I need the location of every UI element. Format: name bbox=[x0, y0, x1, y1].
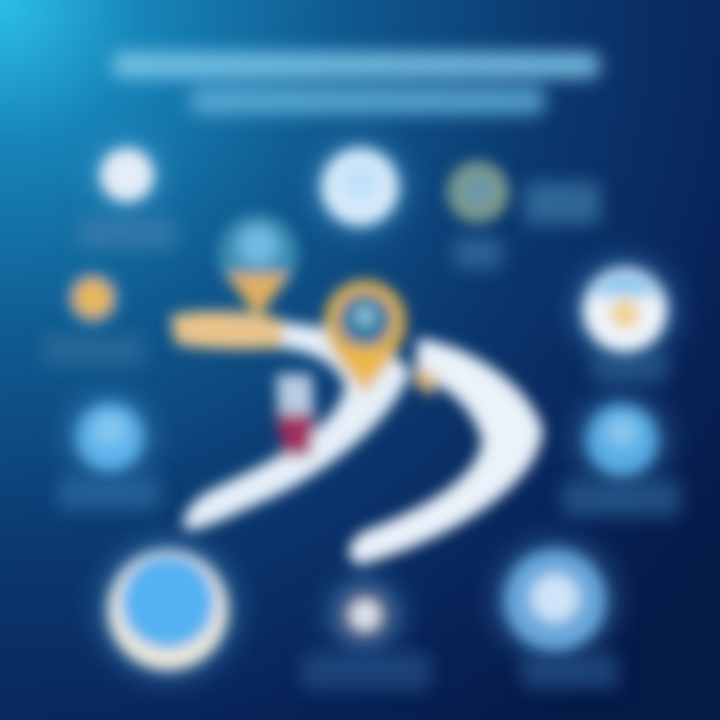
icon: top left circle bbox=[100, 148, 154, 202]
icon: top right circle bbox=[447, 161, 509, 223]
icon: bottom center circle bbox=[335, 585, 395, 645]
icon: right blue circle bbox=[587, 405, 657, 475]
icon: red figure bbox=[276, 374, 316, 456]
title bbox=[112, 52, 600, 114]
label: left blue circle bbox=[58, 476, 160, 510]
label: gold circle bbox=[42, 334, 144, 366]
soft glow halos bbox=[66, 137, 677, 680]
road path bbox=[170, 311, 543, 565]
icon: center pin bbox=[324, 280, 406, 394]
label: bottom right bbox=[522, 654, 618, 688]
icon: right circle bbox=[583, 268, 667, 352]
labels bbox=[42, 182, 680, 689]
icon: left blue circle bbox=[77, 404, 143, 470]
label: bottom center bbox=[302, 653, 430, 689]
icon: top center circle bbox=[321, 148, 399, 226]
icon: large ring circle bbox=[108, 550, 228, 670]
foreground shapes bbox=[65, 148, 667, 670]
icon: gold circle bbox=[65, 270, 121, 326]
label: top right side bbox=[524, 182, 600, 224]
label: right blue circle bbox=[562, 480, 680, 516]
label: right circle bbox=[592, 352, 668, 382]
label: top left bbox=[78, 218, 176, 248]
icon: bottom right circle bbox=[505, 550, 605, 650]
label: top right below bbox=[454, 238, 502, 268]
icon: left pin bbox=[218, 214, 298, 318]
